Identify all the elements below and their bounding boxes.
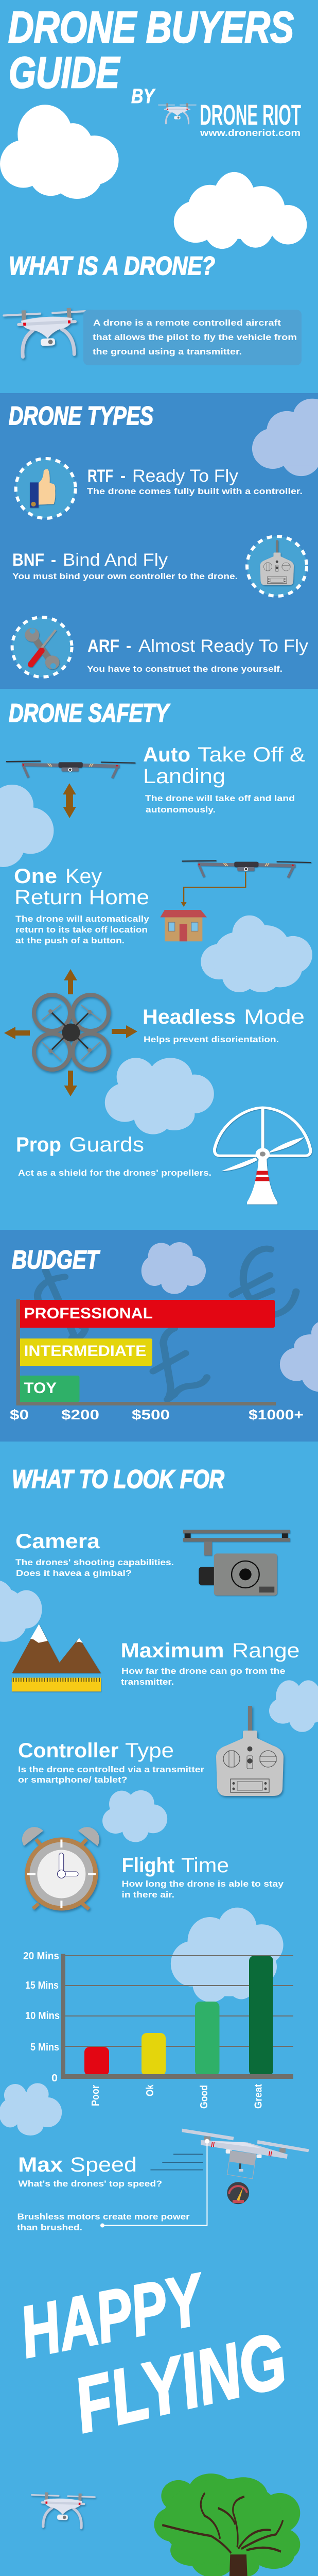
controller type text <box>18 1739 204 1785</box>
max speed text: Max <box>18 2154 63 2176</box>
title: GUIDE <box>9 48 120 97</box>
maximum range text <box>120 1639 299 1687</box>
one key return home text: at the push of a button. <box>15 936 125 945</box>
flight time text: in there air. <box>121 1890 174 1900</box>
cloud: left <box>0 785 54 867</box>
logo: drone riot: www.droneriot.com <box>200 128 301 138</box>
BNF text <box>12 550 238 581</box>
bar chart: flight time: 15 Mins <box>25 1980 59 1991</box>
panel: happy flying <box>0 2258 318 2576</box>
icon: tilted drone with speed lines <box>150 2129 309 2179</box>
title <box>8 3 294 97</box>
cloud: lower left <box>0 2083 62 2136</box>
camera text: The drones' shooting capabilities. <box>15 1557 174 1567</box>
cloud: left <box>0 1580 42 1642</box>
panel: drone types <box>9 399 318 677</box>
panel: header <box>0 3 307 249</box>
prop guards text: Prop <box>16 1133 61 1156</box>
auto take off text: autonomously. <box>146 805 216 815</box>
one key return home text: The drone will automatically <box>15 914 150 924</box>
ARF text <box>87 636 308 674</box>
one key return home text: One <box>14 865 57 888</box>
heading: drone safety: DRONE SAFETY <box>9 699 171 727</box>
icon: drone returning to house <box>160 861 311 941</box>
cloud: lavender top right <box>252 399 318 476</box>
one key return home text: Key <box>65 865 102 888</box>
currency symbols backdrop <box>38 1249 296 1400</box>
bar chart: budget ranges: $500 <box>132 1407 170 1422</box>
cloud: middle <box>105 1058 214 1134</box>
auto take off text <box>143 743 305 815</box>
headless mode text: Helps prevent disorientation. <box>144 1035 279 1044</box>
BNF text: You must bind your own controller to the drone. <box>12 571 238 581</box>
headless mode text: Mode <box>244 1006 305 1028</box>
controller type text: Controller <box>18 1739 118 1762</box>
max speed text: than brushed. <box>17 2223 82 2232</box>
maximum range text: Maximum <box>120 1639 224 1662</box>
cloud: white right <box>174 172 307 249</box>
prop guards text <box>16 1133 211 1178</box>
icon: mountains and ruler <box>12 1624 101 1691</box>
icon: quadcopter with direction arrows <box>4 969 137 1096</box>
bar chart: flight time: Ok <box>145 2084 156 2096</box>
max speed text: What's the drones' top speed? <box>19 2179 162 2189</box>
bar chart: budget ranges: $1000+ <box>249 1407 304 1422</box>
flight time text <box>121 1854 284 1900</box>
headless mode text <box>143 1006 305 1044</box>
BNF text: - <box>51 550 56 570</box>
prop guards text: Act as a shield for the drones' propellers. <box>18 1168 211 1178</box>
heading: drone types: DRONE TYPES <box>9 401 153 430</box>
max speed text <box>17 2154 190 2232</box>
bar chart: flight time <box>23 1951 293 2109</box>
logo: drone riot <box>158 98 301 138</box>
auto take off text: Take Off & <box>198 743 305 766</box>
icon: thumbs up badge <box>16 459 76 518</box>
one key return home text: return to its take off location <box>15 925 148 935</box>
camera text: Camera <box>15 1530 100 1553</box>
bar chart: flight time: 10 Mins <box>25 2010 60 2022</box>
definition text box: A drone is a remote controlled aircraft <box>93 318 281 328</box>
one key return home text: Return Home <box>14 886 149 909</box>
cloud: right <box>201 916 312 992</box>
prop guards text: Guards <box>69 1133 144 1156</box>
cloud: lavender top <box>142 1242 206 1294</box>
maximum range text: How far the drone can go from the <box>121 1666 285 1676</box>
bar chart: flight time: Poor <box>90 2085 101 2106</box>
ARF text: Almost Ready To Fly <box>138 636 308 656</box>
bar chart: flight time: Good <box>199 2085 210 2109</box>
ARF text: You have to construct the drone yourself. <box>87 664 282 674</box>
camera text: Does it havea a gimbal? <box>16 1568 132 1578</box>
illustration: tree <box>154 2473 300 2576</box>
definition text box: the ground using a transmitter. <box>93 347 242 357</box>
maximum range text: Range <box>232 1639 299 1662</box>
icon: camera on gimbal <box>183 1530 290 1596</box>
auto take off text: Auto <box>143 743 190 766</box>
bar chart: flight time: Great <box>253 2084 264 2109</box>
bar chart: budget ranges: TOY <box>24 1380 57 1397</box>
cloud: right <box>269 1680 318 1732</box>
auto take off text: Landing <box>143 765 225 788</box>
heading: what to look for: WHAT TO LOOK FOR <box>12 1465 224 1494</box>
controller type text: Type <box>125 1739 174 1762</box>
RTF text <box>87 466 303 496</box>
definition text box: that allows the pilot to fly the vehicle from <box>93 332 297 342</box>
headless mode text: Headless <box>143 1006 236 1028</box>
ARF text: ARF <box>87 636 119 656</box>
icon: white drone <box>3 307 92 358</box>
bar chart: flight time: 5 Mins <box>30 2042 59 2053</box>
BNF text: Bind And Fly <box>63 550 168 570</box>
callout line: brushless motors <box>100 2139 209 2228</box>
maximum range text: transmitter. <box>121 1677 174 1687</box>
bar chart: budget ranges: INTERMEDIATE <box>24 1343 146 1360</box>
icon: prop guard <box>215 1108 310 1205</box>
camera text <box>15 1530 174 1578</box>
cloud: white left <box>0 105 119 199</box>
icon: flying drone <box>30 2492 96 2528</box>
icon: alarm clock <box>22 1827 99 1910</box>
max speed text: Speed <box>70 2154 137 2176</box>
icon: controller <box>216 1706 284 1796</box>
heading: budget: BUDGET <box>12 1245 101 1274</box>
BNF text: BNF <box>12 550 44 570</box>
cloud: behind chart <box>171 1908 284 2002</box>
controller type text: Is the drone controlled via a transmitter <box>18 1765 204 1774</box>
panel: what is a drone <box>3 251 302 365</box>
heading: what is a drone: WHAT IS A DRONE? <box>9 251 215 280</box>
cloud: centre <box>102 1790 167 1842</box>
panel: drone safety <box>0 699 312 1205</box>
ARF text: - <box>126 636 131 656</box>
icon: tools badge <box>12 617 72 677</box>
icon: speedometer <box>227 2182 249 2204</box>
bar chart: flight time: 20 Mins <box>23 1951 59 1962</box>
bar chart: flight time: 0 <box>51 2073 58 2084</box>
controller type text: or smartphone/ tablet? <box>18 1775 128 1785</box>
RTF text: Ready To Fly <box>132 466 238 486</box>
one key return home text <box>14 865 150 945</box>
flight time text: Flight <box>121 1854 174 1877</box>
byline: BY <box>131 85 156 108</box>
flight time text: How long the drone is able to stay <box>121 1879 284 1889</box>
max speed text: Brushless motors create more power <box>17 2212 190 2222</box>
RTF text: RTF <box>87 466 113 486</box>
heading: happy: HAPPY <box>14 2258 213 2372</box>
bar chart: budget ranges: $200 <box>61 1407 99 1422</box>
definition text box <box>83 310 302 365</box>
RTF text: - <box>120 466 126 486</box>
auto take off text: The drone will take off and land <box>145 793 295 803</box>
bar chart: budget ranges: PROFESSIONAL <box>24 1305 153 1322</box>
bar chart: budget ranges <box>10 1299 304 1422</box>
panel: budget <box>10 1242 318 1422</box>
flight time text: Time <box>181 1854 229 1877</box>
panel: what to look for <box>0 1465 318 2232</box>
bar chart: budget ranges: $0 <box>10 1407 29 1422</box>
icon: dark drone with take-off arrow <box>6 761 135 818</box>
RTF text: The drone comes fully built with a controller. <box>87 486 303 496</box>
cloud: lavender right <box>280 1320 318 1392</box>
icon: controller badge <box>247 536 307 596</box>
